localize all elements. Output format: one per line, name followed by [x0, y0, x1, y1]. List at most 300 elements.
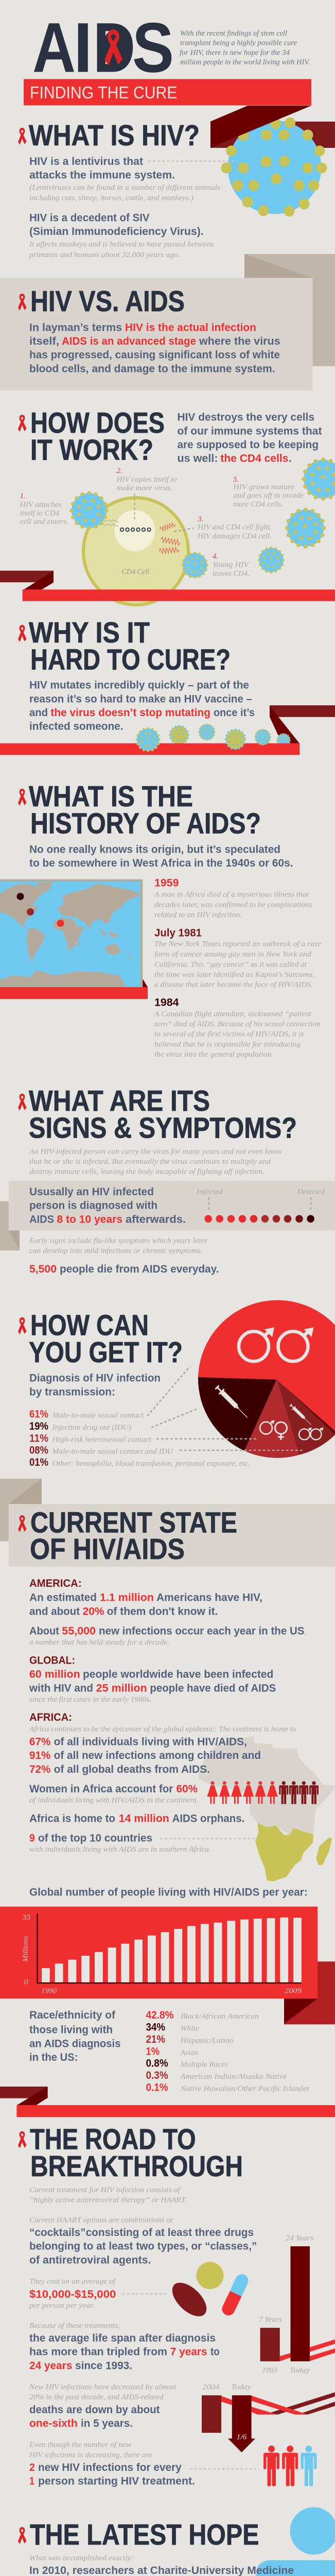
ribbon: [270, 705, 335, 743]
text block: Africa: of all new infections among children and: [54, 1750, 261, 1761]
text block: life span: 24 years: [29, 2360, 72, 2371]
icon: section ribbon: [18, 128, 27, 145]
text block: Africa: of individuals living with HIV/AIDS in the continent.: [29, 1796, 199, 1804]
bar chart: 1990: [41, 1987, 57, 1995]
chart: life span bars: 1993: [262, 2366, 277, 2375]
text block: early signs: 5,500: [29, 1263, 57, 1275]
heading: [29, 616, 231, 676]
icon: large patient figure: [256, 2507, 335, 2576]
text block: early signs: people die from AIDS everyday.: [60, 1263, 219, 1275]
panel: current state: [0, 1479, 335, 2117]
text block: of our immune systems that: [177, 425, 322, 437]
timeline dots: Detected: [297, 1188, 325, 1196]
text block: America: new infections occur each year in the US: [99, 1625, 305, 1637]
heading: HOW DOES: [30, 406, 165, 439]
chart: life span bars: Today: [289, 2366, 310, 2375]
timeline: July 1981: [154, 927, 321, 989]
step 1: cell and enters.: [20, 518, 68, 526]
timeline: July 1981: form of cancer among gay men in New York and: [154, 951, 312, 959]
text block: Africa: Africa is home to: [29, 1813, 115, 1825]
banner: finding the cure: [24, 79, 311, 105]
text block: America: An estimated: [29, 1592, 97, 1604]
text block: life span: the average life span after diagnosis: [29, 2332, 216, 2344]
text block: America: 55,000: [62, 1625, 96, 1637]
text block: America: ,: [305, 1628, 307, 1636]
text block: life span: [29, 2321, 220, 2371]
text block: deaths: [29, 2383, 177, 2430]
text block: are supposed to be keeping: [177, 439, 319, 451]
icon: pills: [166, 2262, 242, 2323]
legend: race percentages: 21%: [146, 2033, 165, 2045]
text block: once it’s: [214, 707, 255, 719]
heading: BREAKTHROUGH: [30, 2150, 243, 2183]
heading: WHAT IS THE: [29, 780, 193, 813]
text block: America: a number that has held steady for a decade.: [29, 1638, 169, 1647]
panel: how can you get it: [18, 1300, 335, 1468]
icon: section ribbon: [18, 2131, 27, 2148]
legend: transmission: 19%: [29, 1420, 48, 1432]
text block: [29, 843, 293, 869]
icon: Africa map: [199, 1736, 335, 1882]
text block: lentivirus: attacks the immune system.: [29, 170, 175, 181]
text block: Africa: 91%: [29, 1750, 51, 1761]
step 2: make more virus.: [117, 484, 172, 493]
leader lines: [147, 1366, 304, 1450]
text block: life span: 7 years: [170, 2346, 207, 2358]
text block: [29, 1372, 161, 1398]
text block: cost: $10,000-$15,000: [29, 2289, 116, 2300]
text block: early signs: can develop into mild infections or chronic symptoms.: [29, 1247, 202, 1255]
heading: WHAT ARE ITS: [29, 1084, 210, 1117]
step 4: Young HIV: [213, 561, 250, 569]
timeline: 1984: the virus into the general population.: [154, 1050, 273, 1059]
ribbon fold: [210, 106, 311, 148]
text block: deaths: in 5 years.: [81, 2418, 133, 2430]
timeline: 1959: 1959: [154, 877, 179, 889]
step 1: itself to CD4: [20, 510, 59, 518]
ribbon: [0, 571, 335, 601]
step 4: 4.: [213, 552, 218, 561]
text block: [29, 321, 280, 375]
text block: life span: has more than tripled from: [29, 2346, 167, 2358]
intro text: for HIV, there is new hope for the 34: [180, 48, 290, 57]
title: AIDS: S: [132, 8, 174, 88]
text block: life span: Because of these treatments,: [29, 2321, 120, 2330]
panel: how does it work: [0, 406, 335, 605]
text block: [29, 2554, 298, 2576]
chart: life span bars: 24 Years: [286, 2234, 314, 2242]
text block: Africa: of all individuals living with HIV/AIDS,: [54, 1736, 247, 1748]
legend: transmission: High-risk heterosexual contact: [52, 1435, 152, 1444]
step 2: 2.: [117, 467, 122, 475]
CD4 cell: [83, 498, 188, 605]
step 1: [20, 492, 68, 526]
legend: transmission: 61%: [29, 1409, 48, 1420]
virus: mature large: [285, 507, 326, 549]
title: AIDS: [32, 8, 174, 88]
callout: diagnosis time: [29, 1186, 186, 1225]
text block: HAART: “highly active antiretroviral therapy” or HAART.: [29, 2196, 187, 2205]
intro text: million people in the world living with HIV.: [180, 58, 310, 66]
timeline: July 1981: the time was later identified as Kaposi's Sarcoma,: [154, 971, 315, 979]
text block: life span: since 1993.: [75, 2360, 132, 2371]
text block: SIV: [29, 212, 214, 259]
intro text: transplant being a highly possible cure: [180, 39, 297, 47]
text block: and: [29, 707, 48, 719]
heading: [29, 1084, 297, 1144]
timeline: July 1981: California. This “gay cancer” as it was called at: [154, 960, 307, 969]
text block: race: those living with: [29, 2024, 113, 2036]
text block: HIV destroys the very cells: [177, 412, 314, 423]
timeline: July 1981: July 1981: [154, 927, 202, 939]
step 3: HIV damages CD4 cell.: [197, 532, 272, 540]
text block: new infections: person starting HIV treatment.: [38, 2476, 195, 2487]
timeline dots: [196, 1188, 325, 1223]
heading: HISTORY OF AIDS?: [30, 807, 261, 840]
intro text: [180, 29, 310, 66]
heading: THE LATEST HOPE: [30, 2518, 259, 2551]
world map: [0, 879, 143, 987]
text block: America: and about: [29, 1605, 80, 1617]
icon: section ribbon: [18, 294, 27, 311]
text block: where the virus: [199, 335, 280, 347]
step 5: more CD4 cells.: [233, 500, 283, 509]
timeline: 1984: [154, 997, 321, 1059]
viruses behind ribbon: [169, 725, 291, 748]
text block: America: 1.1 million: [100, 1592, 154, 1604]
text block: Africa: of the top 10 countries: [38, 1832, 152, 1844]
title: AIDS: I: [74, 8, 93, 88]
text block: to be somewhere in West Africa in the 1940s or 60s.: [29, 857, 293, 869]
legend: race percentages: Black/African American: [181, 2012, 259, 2021]
text block: [29, 680, 255, 733]
callout: diagnosis time: person is diagnosed with: [29, 1200, 157, 1212]
text block: lentivirus: including cats, sheep, horses, cattle, and monkeys.): [29, 194, 193, 202]
chart heading: Global number of people living with HIV/AIDS per year:: [29, 1886, 308, 1898]
text block: America: of them don't know it.: [107, 1605, 218, 1617]
step 5: [233, 476, 304, 509]
heading: [29, 1309, 183, 1369]
step 4: [213, 552, 250, 578]
text block: Africa: Women in Africa account for: [29, 1783, 173, 1795]
ribbon: [0, 2087, 335, 2117]
text block: deaths: one-sixth: [29, 2418, 78, 2430]
ribbon fold bar: [210, 122, 335, 148]
text block: lentivirus: (Lentiviruses can be found in a number of different animals: [29, 183, 220, 192]
virus: attaching: [69, 491, 109, 530]
text block: Global: since the first cases in the early 1980s.: [29, 1696, 151, 1704]
ribbon fold: [284, 1961, 335, 2024]
legend: race percentages: 0.8%: [146, 2058, 168, 2070]
text block: HAART: Current HAART options are combinations or: [29, 2216, 173, 2224]
title: AIDS: D: [93, 8, 135, 88]
legend: transmission: 01%: [29, 1456, 48, 1468]
text block: Africa: Africa continues to be the epicenter of the global epidemic: The continent is home to: [29, 1725, 296, 1734]
text block: deaths: New HIV infections have decreased by almost: [29, 2383, 177, 2391]
heading: [30, 2123, 243, 2183]
panel: what is HIV: [18, 106, 335, 259]
legend: race percentages: American Indian/Alsaska Native: [180, 2073, 287, 2081]
text block: Global: GLOBAL:: [29, 1654, 75, 1666]
cell label: CD4 Cell: [122, 568, 149, 576]
bar chart: 35: [22, 1913, 31, 1922]
heading: OF HIV/AIDS: [30, 1533, 185, 1566]
red bar: [0, 743, 299, 755]
text block: SIV: It affects monkeys and is believed to have passed between: [29, 241, 214, 249]
icon: section ribbon: [18, 1317, 27, 1334]
text block: us well:: [177, 453, 218, 465]
text block: new infections: HIV infections is decreasing, there are: [29, 2451, 152, 2459]
text block: lentivirus: [29, 156, 220, 202]
bar chart: Millions: [22, 1936, 30, 1962]
text block: new infections: [29, 2441, 195, 2487]
legend: transmission: Male-to-male sexual contact: [52, 1412, 144, 1420]
text block: new infections: 2: [29, 2462, 35, 2473]
text block: the virus doesn’t stop mutating: [50, 707, 210, 719]
text block: .: [289, 453, 292, 465]
legend: race percentages: White: [181, 2025, 199, 2033]
legend: race percentages: Hispanic/Latino: [180, 2037, 234, 2045]
text block: race: Race/ethnicity of: [29, 2009, 116, 2021]
step 3: HIV and CD4 cell fight.: [197, 523, 272, 532]
heading: IT WORK?: [30, 433, 153, 466]
legend: race percentages: Native Hawaiian/Other Pacific Islander: [180, 2084, 310, 2093]
text block: race: [29, 2009, 120, 2063]
bar chart: 2009: [285, 1987, 302, 1995]
text block: early signs: [29, 1236, 219, 1275]
icon: section ribbon: [18, 415, 27, 432]
text block: Global: 60 million: [29, 1669, 80, 1681]
text block: SIV: HIV is a decedent of SIV: [29, 212, 150, 224]
text block: Africa: 72%: [29, 1764, 51, 1775]
icon: section ribbon: [18, 1094, 27, 1111]
virus: mature: [258, 547, 285, 573]
viruses in front of ribbon: [136, 723, 271, 752]
timeline: 1959: A man in Africa died of a mysterious illness that: [154, 891, 309, 899]
text block: that he or she is infected. But eventually the virus continues to multiply and: [29, 1158, 271, 1166]
heading: THE ROAD TO: [30, 2123, 196, 2156]
text block: SIV: (Simian Immunodeficiency Virus).: [29, 226, 204, 238]
text block: deaths: 20% in the past decade, and AIDS-related: [29, 2393, 164, 2401]
icon: section ribbon: [18, 1515, 27, 1532]
intro text: With the recent findings of stem cell: [180, 29, 287, 38]
timeline: 1959: decades later, was confirmed to be complications: [154, 901, 312, 909]
icon: section ribbon: [18, 625, 27, 642]
text block: by transmission:: [29, 1386, 115, 1398]
callout: diagnosis time: AIDS: [29, 1213, 54, 1225]
callout: diagnosis time: 8 to 10 years: [57, 1213, 122, 1225]
heading: WHAT IS HIV?: [29, 119, 200, 152]
icon: women and men pictogram: [207, 1781, 319, 1804]
text block: HIV mutates incredibly quickly – part of the: [29, 680, 249, 691]
map ribbon: [0, 979, 148, 999]
callout: diagnosis time: afterwards.: [126, 1213, 186, 1225]
text block: Africa: of all global deaths from AIDS.: [54, 1764, 210, 1775]
panel: signs and symptoms: [0, 1084, 335, 1275]
text block: SIV: primates and humans about 32,000 years ago.: [29, 251, 180, 259]
timeline: 1959: related to an HIV infection.: [154, 911, 242, 919]
heading: HOW CAN: [30, 1309, 149, 1342]
text block: lentivirus: HIV is a lentivirus that: [29, 156, 143, 167]
text block: America: 20%: [83, 1605, 104, 1617]
text block: Africa: with individuals living with AIDS are in southern Africa.: [29, 1845, 211, 1854]
legend: race percentages: [146, 2009, 310, 2093]
text block: [177, 412, 322, 465]
step 4: leaves CD4.: [213, 570, 250, 578]
text block: In layman’s terms: [29, 321, 122, 333]
legend: transmission: Other: hemophilia, blood transfusion, perinatal exposure, etc.: [52, 1460, 250, 1468]
text block: AIDS is an advanced stage: [62, 335, 196, 347]
text block: cost: They cost on an average of: [29, 2278, 116, 2286]
heading: HARD TO CURE?: [30, 643, 231, 676]
text block: HAART: [29, 2186, 257, 2266]
timeline: July 1981: a disease that later became the face of HIV/AIDS.: [154, 981, 313, 989]
text block: blood cells, and damage to the immune system.: [29, 363, 275, 375]
text block: HAART: Current treatment for HIV infection consists of: [29, 2186, 181, 2194]
chart: deaths bars and ribbons: 1/6: [237, 2433, 247, 2441]
text block: Global: people have died of AIDS: [150, 1682, 276, 1694]
chart: life span bars: 7 Years: [259, 2316, 282, 2324]
step 5: 5.: [233, 476, 239, 484]
text block: Global: people worldwide have been infected: [83, 1669, 273, 1681]
legend: transmission: 11%: [29, 1432, 48, 1444]
icon: small syringe: [289, 1403, 313, 1427]
legend: race percentages: 42.8%: [146, 2009, 174, 2021]
banner: finding the cure: FINDING THE CURE: [30, 83, 177, 102]
text block: America: About: [29, 1625, 59, 1637]
icon: male male: [239, 1327, 314, 1361]
pie chart: [198, 1300, 335, 1458]
panel: latest hope: [0, 2507, 335, 2576]
legend: transmission: 08%: [29, 1445, 48, 1456]
heading: [29, 780, 261, 840]
text block: America: Americans have HIV,: [156, 1592, 262, 1604]
text block: An HIV-infected person can carry the virus for many years and not even know: [29, 1147, 282, 1156]
text block: Global: with HIV and: [29, 1682, 93, 1694]
text block: reason it’s so hard to make an HIV vaccine –: [29, 693, 252, 705]
text block: early signs: Early signs include flu-like symptoms which years later: [29, 1236, 208, 1245]
text block: deaths: deaths are down by about: [29, 2404, 160, 2416]
diagram: CD4 cell lifecycle: [20, 457, 335, 605]
legend: race percentages: Multiple Races: [180, 2061, 228, 2069]
text block: Africa: AFRICA:: [29, 1711, 72, 1723]
text block: race: an AIDS diagnosis: [29, 2038, 120, 2049]
text block: Africa: 14 million: [119, 1813, 169, 1825]
panel: road to breakthrough: [18, 2123, 335, 2487]
text block: cost: [29, 2278, 116, 2310]
text block: Diagnosis of HIV infection: [29, 1372, 161, 1384]
step 5: and goes off to invade: [233, 492, 304, 500]
text block: Africa: [29, 1711, 296, 1854]
text block: Africa: 9: [29, 1832, 35, 1844]
panel: HIV vs AIDS: [0, 254, 335, 391]
text block: HAART: “cocktails”consisting of at least three drugs: [29, 2227, 254, 2239]
chart: life span bars: [259, 2234, 335, 2375]
text block: has progressed, causing significant loss of white: [29, 349, 280, 361]
text block: new infections: 1: [29, 2476, 34, 2487]
step 5: HIV grows mature: [233, 483, 294, 491]
heading: SIGNS & SYMPTOMS?: [29, 1111, 297, 1144]
text block: HAART: of antiretroviral agents.: [29, 2254, 151, 2266]
text block: Global: 25 million: [96, 1682, 147, 1694]
step 3: [197, 515, 272, 540]
virus: top right: [302, 457, 335, 501]
legend: transmission: [29, 1409, 250, 1468]
legend: race percentages: 1%: [146, 2045, 160, 2057]
DNA strand: [120, 528, 151, 531]
timeline: 1984: to several of the first victims of HIV/AIDS, it is: [154, 1030, 304, 1039]
icon: section ribbon: [18, 2527, 27, 2544]
text block: No one really knows its origin, but it’s speculated: [29, 843, 280, 855]
panel: history of AIDS: [0, 780, 321, 1059]
timeline: 1984: believed that he is responsible for introducing: [154, 1040, 301, 1048]
text block: itself,: [29, 335, 59, 347]
timeline: July 1981: The New York Times reported an outbreak of a rare: [154, 940, 321, 948]
text block: Africa: AIDS orphans.: [172, 1813, 244, 1825]
legend: race percentages: 0.1%: [146, 2081, 168, 2093]
chart: deaths bars and ribbons: Today: [231, 2383, 251, 2391]
bar chart: 0: [24, 1978, 28, 1987]
icon: male female: [260, 1420, 287, 1440]
text block: HAART: belonging to at least two types, or “classes,”: [29, 2241, 257, 2252]
title: AIDS: A: [32, 8, 76, 88]
heading: WHY IS IT: [29, 616, 150, 649]
timeline: 1984: A Canadian flight attendant, nicknamed “patient: [154, 1010, 312, 1018]
text block: Africa: 67%: [29, 1736, 51, 1748]
icon: HIV virus: [221, 117, 327, 216]
text block: new infections: Even though the number of new: [29, 2441, 131, 2449]
timeline: 1959: [154, 877, 312, 919]
text block: HIV is the actual infection: [125, 321, 256, 333]
icon: small male male: [299, 1428, 323, 1439]
legend: race percentages: Asian: [180, 2048, 198, 2057]
panel: why is it hard to cure: [0, 616, 335, 755]
step 1: 1.: [20, 492, 26, 500]
heading: [30, 406, 165, 466]
RNA squiggles: [159, 522, 181, 554]
text block: What was accomplished exactly:: [29, 2554, 134, 2562]
callout: diagnosis time: Ususally an HIV infected: [29, 1186, 154, 1198]
virus: leaving: [181, 552, 208, 579]
text block: [29, 1147, 282, 1176]
text block: race: in the US:: [29, 2052, 78, 2063]
header: [24, 8, 311, 105]
text block: America: AMERICA:: [29, 1578, 82, 1589]
heading: YOU GET IT?: [29, 1336, 183, 1369]
legend: race percentages: 34%: [146, 2022, 165, 2033]
step 2: HIV copies itself to: [116, 476, 177, 484]
virus strands: [100, 520, 118, 527]
step 1: HIV attaches: [20, 501, 62, 509]
legend: transmission: Injection drug use (IDU): [52, 1423, 131, 1432]
band backing: [0, 1181, 335, 1250]
step 3: 3.: [197, 515, 203, 523]
chart: deaths bars and ribbons: 2004: [203, 2383, 220, 2391]
text block: cost: per person per year.: [29, 2301, 94, 2310]
icon: large ribbon: [104, 29, 122, 66]
legend: transmission: Male-to-male sexual contact and IDU: [52, 1448, 173, 1456]
icon: people 2 to 1: [263, 2446, 316, 2486]
text block: the CD4 cells: [220, 453, 288, 465]
step 2: [116, 467, 177, 493]
timeline dots: Infected: [196, 1188, 223, 1196]
timeline: 1984: 1984: [154, 997, 179, 1009]
chart: deaths bars and ribbons: [202, 2383, 335, 2452]
text block: Global: [29, 1654, 276, 1704]
text block: life span: to: [210, 2346, 220, 2358]
text block: Africa: 60%: [176, 1783, 198, 1795]
heading: [30, 1506, 237, 1566]
